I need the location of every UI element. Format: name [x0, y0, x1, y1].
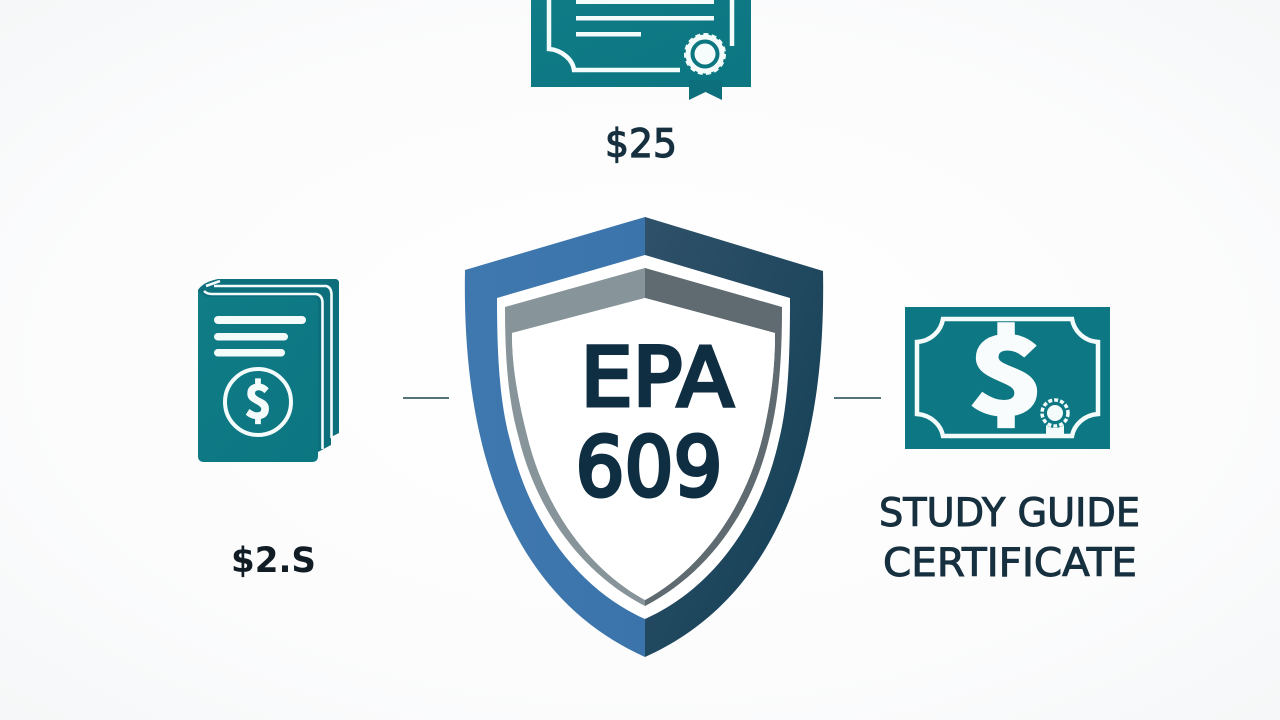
certificate ribbon	[689, 80, 722, 100]
label: study guide certificate	[879, 491, 1140, 586]
shield outer left	[465, 217, 645, 657]
shield: EPA 609	[465, 217, 823, 657]
bill border	[917, 319, 1098, 436]
label: study guide certificate: STUDY GUIDE	[879, 491, 1140, 536]
shield white band	[497, 255, 790, 619]
certificate seal	[684, 33, 726, 75]
icon: certificate	[531, 0, 751, 100]
icon: dollar bill certificate	[905, 292, 1110, 449]
shield inner panel	[512, 298, 775, 600]
shield text EPA: EPA	[580, 332, 734, 426]
book cover	[198, 291, 318, 462]
certificate text lines	[576, 0, 714, 36]
book dollar badge: $	[244, 366, 272, 432]
connector: right	[834, 397, 881, 399]
shield text 609: 609	[576, 420, 722, 516]
price: certificate $25: $25	[605, 122, 677, 167]
shield grey frame left	[505, 268, 645, 606]
connector: left	[403, 397, 449, 399]
book page block	[198, 279, 339, 456]
icon: study guide book	[198, 279, 339, 462]
label: study guide certificate: CERTIFICATE	[883, 541, 1137, 586]
book text lines	[214, 316, 306, 356]
price: book $2.S: $2.S	[231, 541, 316, 581]
bill dollar sign: $	[968, 292, 1044, 444]
certificate border	[549, 0, 732, 70]
shield outer right	[645, 217, 823, 657]
shield grey frame right	[645, 268, 782, 606]
book page edges	[204, 281, 332, 449]
bill seal	[1040, 398, 1070, 436]
book dollar badge	[225, 366, 291, 435]
